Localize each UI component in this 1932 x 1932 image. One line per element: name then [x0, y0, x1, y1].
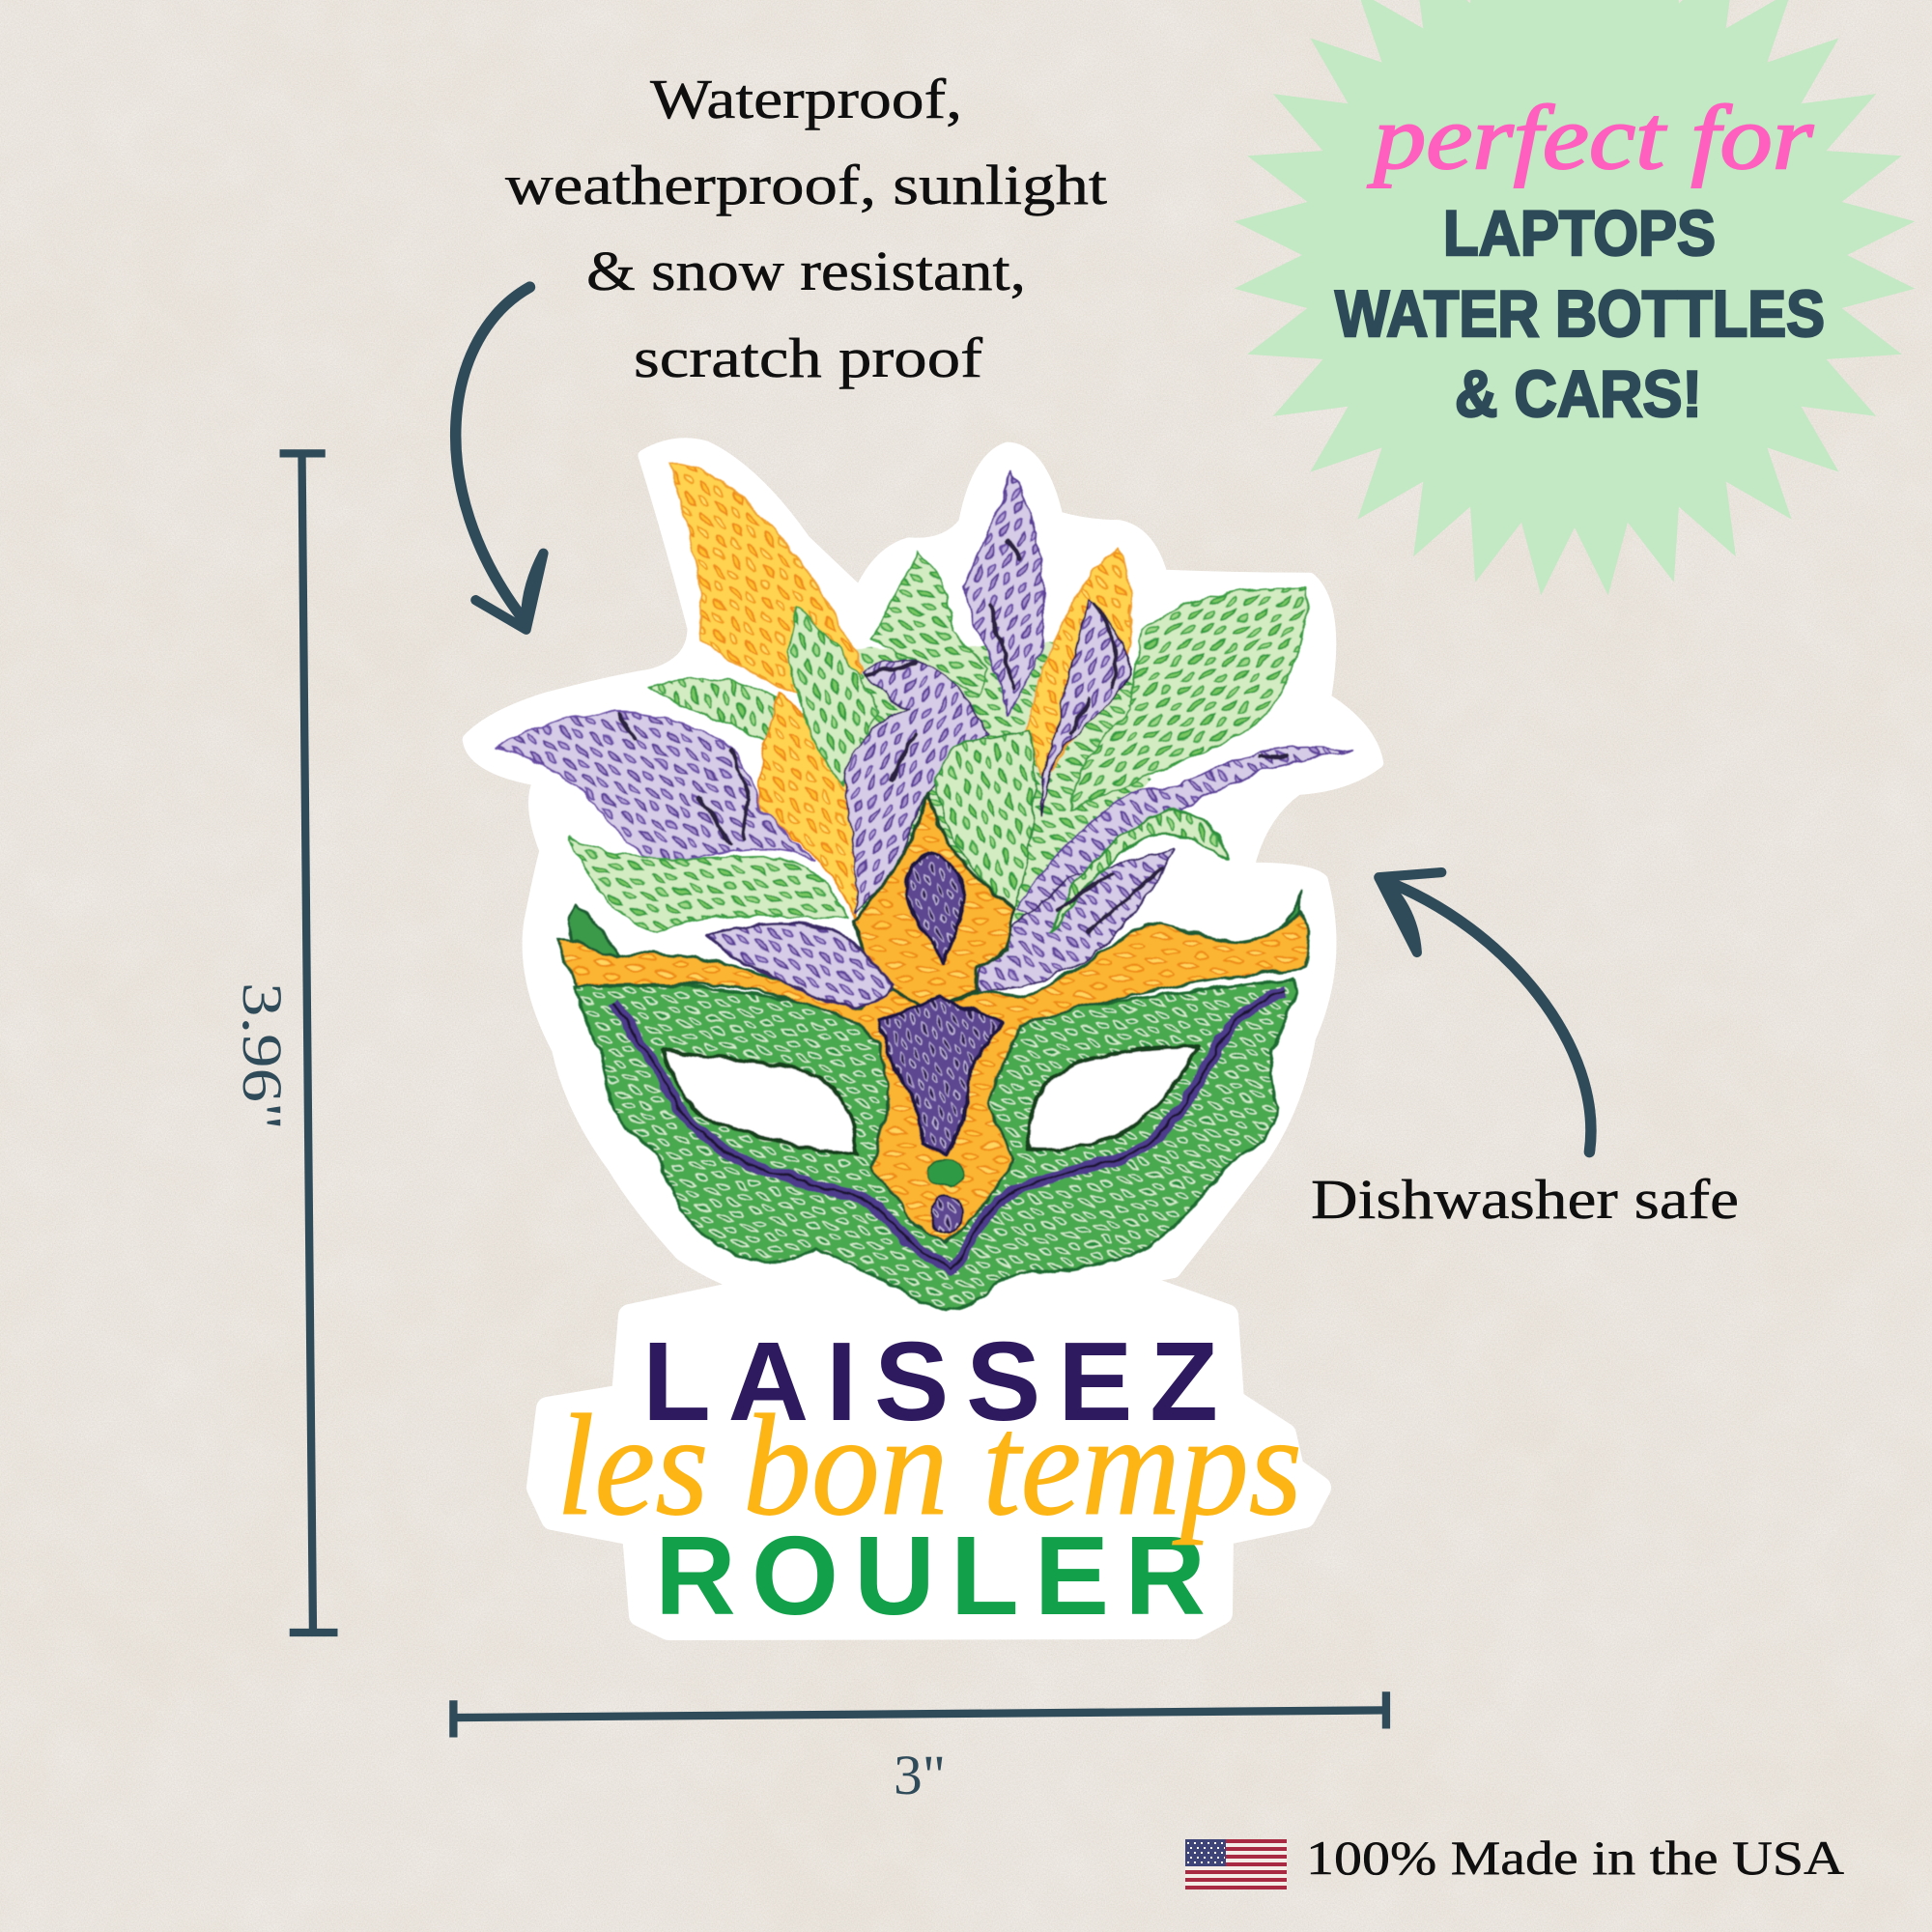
feather: purple right mid — [1041, 599, 1131, 815]
waterproof description text: Waterproof, — [650, 68, 962, 130]
feather: yellow center left — [759, 693, 863, 918]
sticker — [469, 443, 1378, 1638]
slogan: rouler: ROULER — [655, 1513, 1206, 1638]
waterproof description text — [505, 68, 1107, 389]
badge line: cars: & CARS! — [1455, 357, 1702, 431]
mask gold diamond — [854, 792, 1014, 1009]
arrow to sticker from waterproof text — [456, 287, 543, 630]
mask gold band — [558, 912, 1310, 1243]
feather: orange top left — [668, 464, 863, 704]
feather: green big right — [1069, 587, 1307, 810]
waterproof description text: scratch proof — [634, 327, 983, 389]
badge line: laptops: LAPTOPS — [1443, 197, 1716, 269]
width dimension line — [453, 1691, 1386, 1737]
starburst badge — [1235, 0, 1915, 595]
purple nose gem — [878, 997, 1002, 1155]
mask lobes — [570, 892, 1300, 962]
dishwasher safe text: Dishwasher safe — [1311, 1168, 1739, 1231]
height label: 3.96" — [231, 982, 294, 1130]
height dimension line — [280, 453, 337, 1633]
slogan: laissez: LAISSEZ — [642, 1319, 1218, 1444]
starburst shape — [1235, 0, 1915, 595]
feather: green top center — [872, 553, 989, 696]
sticker white die-cut: mask part — [469, 443, 1378, 1323]
feather: purple long right — [1017, 747, 1352, 921]
slogan: les bon temps: les bon temps — [556, 1385, 1302, 1546]
badge line: water bottles: WATER BOTTLES — [1335, 277, 1825, 351]
arrow to sticker from dishwasher text — [1378, 872, 1591, 1152]
feather: green lower left — [570, 836, 847, 932]
icon: american flag — [1185, 1839, 1287, 1889]
feather underlay — [780, 639, 1150, 921]
left eye — [663, 1050, 857, 1155]
purple gem bottom — [931, 1194, 961, 1233]
mask body green — [574, 980, 1297, 1310]
sticker white die-cut: text part — [538, 1285, 1320, 1629]
feather: purple lower right — [979, 848, 1174, 991]
feather: green curl — [1051, 810, 1227, 932]
purple trim — [613, 991, 1285, 1269]
purple feather tip left on band — [706, 923, 894, 1006]
feather: green center left — [789, 608, 878, 786]
feather: purple center tall — [965, 470, 1044, 716]
feather: yellow right — [1026, 549, 1132, 781]
feather: green center — [934, 730, 1035, 909]
badge script heading: perfect for — [1367, 88, 1813, 188]
mask illustration — [497, 464, 1352, 1310]
feather: purple left — [497, 713, 813, 860]
right eye — [1028, 1047, 1199, 1150]
green gem — [927, 1160, 965, 1185]
feather: green sprig left — [650, 679, 805, 742]
width label: 3" — [894, 1744, 946, 1806]
made in the USA text: 100% Made in the USA — [1306, 1831, 1844, 1885]
waterproof description text: weatherproof, sunlight — [505, 154, 1107, 216]
purple gem top — [906, 854, 965, 962]
waterproof description text: & snow resistant, — [586, 240, 1026, 302]
feather: purple center sprig — [844, 660, 989, 912]
dark feather accents — [619, 540, 1285, 932]
